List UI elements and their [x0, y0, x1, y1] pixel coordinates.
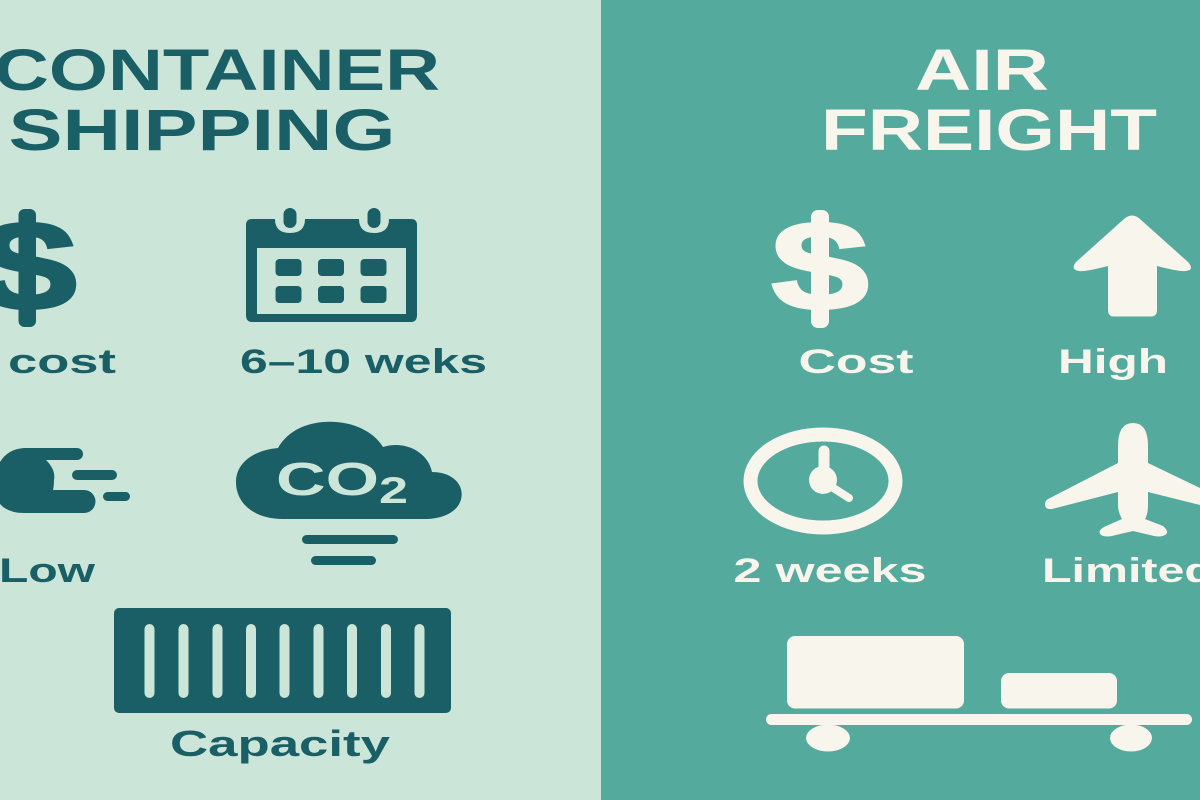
- label: low: Low: [0, 552, 96, 590]
- icon: airplane: [1045, 423, 1200, 536]
- icon: CO2 cloud: [236, 422, 462, 565]
- label: capacity: Capacity: [170, 723, 390, 764]
- title: container shipping: SHIPPING: [8, 98, 396, 163]
- label: limited: Limited: [1042, 552, 1200, 590]
- title: container shipping: [0, 38, 440, 163]
- icon: shipping container: [114, 608, 451, 713]
- label: high: High: [1058, 343, 1168, 381]
- icon: slow speed: [0, 448, 130, 513]
- title: air freight: FREIGHT: [821, 98, 1157, 163]
- icon: dollar sign: [0, 195, 77, 338]
- title: air freight: [821, 38, 1157, 163]
- panel: air freight: [601, 0, 1200, 800]
- icon: up arrow: [1074, 216, 1191, 316]
- icon: CO2 cloud: 2: [379, 470, 408, 511]
- label: transit time: 6–10 weks: [240, 343, 487, 381]
- title: air freight: AIR: [915, 38, 1049, 103]
- icon: dollar sign: $: [771, 195, 869, 338]
- title: container shipping: CONTAINER: [0, 38, 440, 103]
- icon: cargo on platform: [766, 636, 1192, 752]
- label: transit time: 2 weeks: [734, 552, 926, 590]
- icon: clock: [750, 434, 896, 528]
- icon: calendar: [246, 208, 417, 322]
- label: cost: cost: [8, 343, 116, 381]
- label: cost: Cost: [798, 343, 914, 381]
- icon: CO2 cloud: CO: [276, 453, 379, 505]
- panel: container shipping: [0, 0, 601, 800]
